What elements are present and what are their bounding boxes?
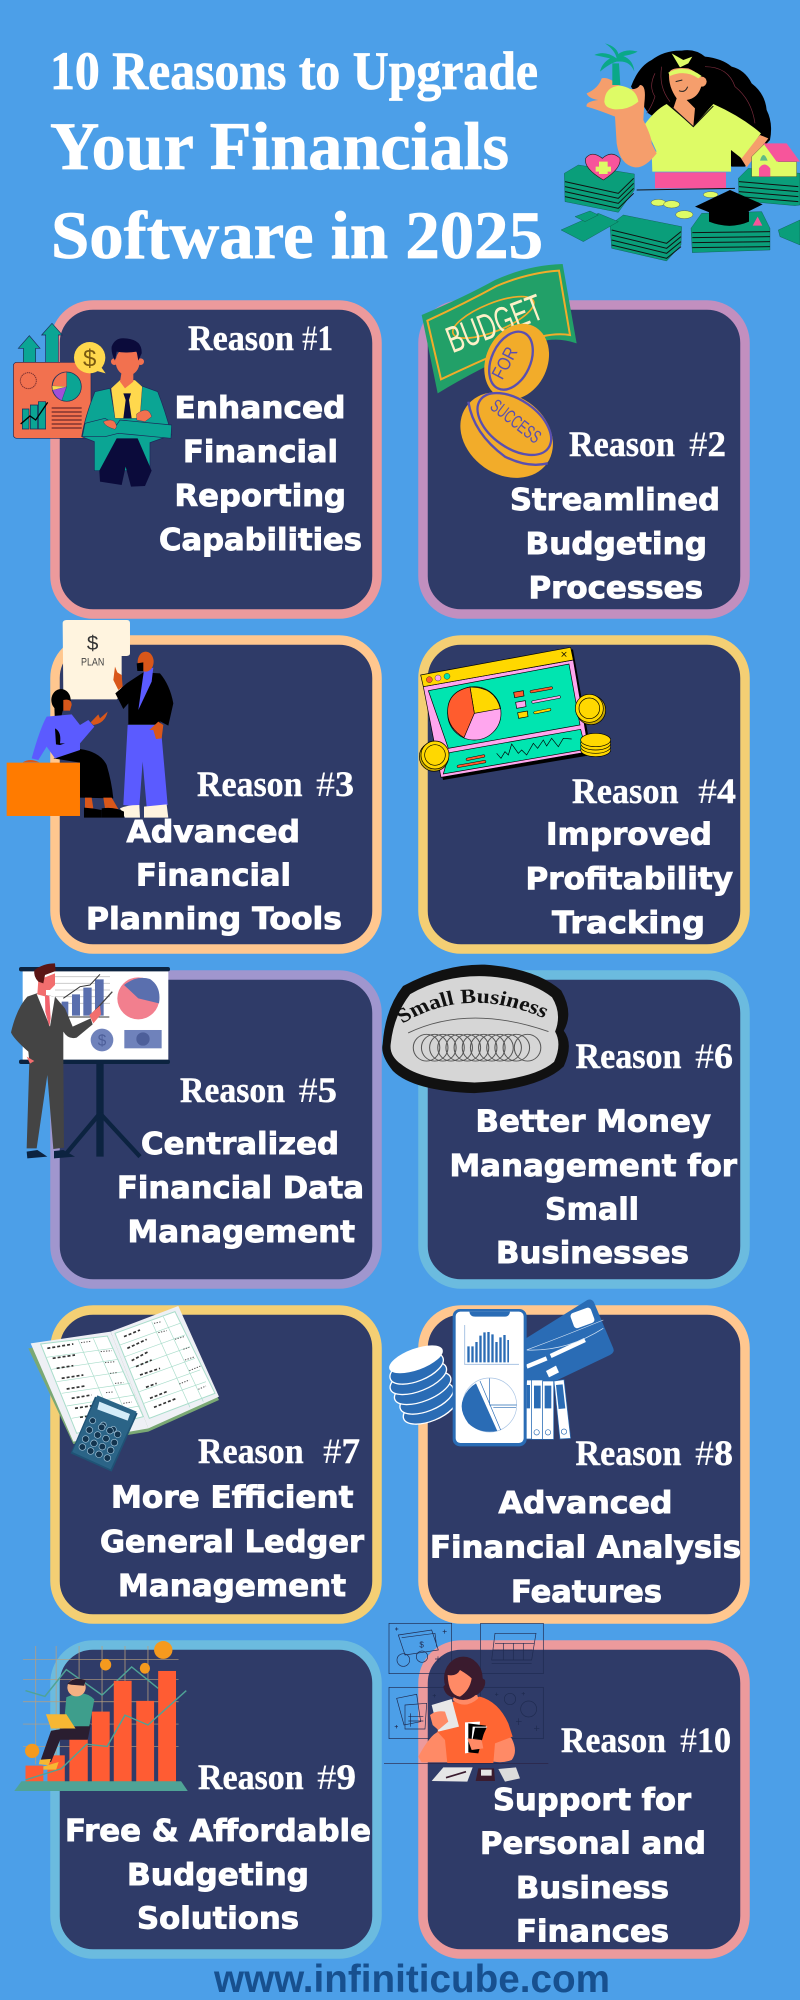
reason title: Planning Tools (86, 902, 342, 937)
icon: ledger book and calculator (28, 1306, 219, 1472)
icon: graduation cap (695, 190, 763, 226)
panel: reason 2 (422, 264, 745, 614)
reason title: Free & Affordable (65, 1814, 371, 1849)
reason title (430, 1486, 741, 1610)
icon: money stacks (561, 165, 800, 261)
reason label: #8 (695, 1433, 733, 1473)
panel: reason 4 (419, 640, 745, 949)
panel: reason 6 (382, 964, 750, 1289)
icon: presenter at chart board (11, 963, 170, 1158)
panel: reason 8 (386, 1300, 745, 1619)
reason title: Capabilities (159, 523, 362, 558)
reason title: Budgeting (526, 527, 707, 562)
reason title: Tracking (552, 906, 705, 941)
reason label (561, 1720, 731, 1760)
icon: two people with plan (7, 620, 173, 818)
reason label: Reason (198, 1757, 304, 1797)
website url footer: www.infiniticube.com (213, 1958, 610, 2000)
reason label: Reason (569, 424, 675, 464)
panel: reason 9 (14, 1641, 377, 1954)
reason label: Reason (198, 1431, 304, 1471)
reason label: Reason (576, 1036, 682, 1076)
icon: heart (585, 154, 620, 180)
reason title: Personal and (480, 1827, 706, 1862)
icon: woman with receipts and finance line art: $ (419, 1640, 424, 1649)
reason title: Profitability (526, 862, 733, 897)
reason title (526, 818, 733, 941)
reason title: Financial (136, 859, 291, 894)
icon: house (752, 143, 800, 177)
reason title: Processes (528, 571, 703, 606)
reason title: Management (118, 1569, 346, 1604)
reason label: #3 (316, 764, 354, 804)
reason title (480, 1783, 706, 1950)
reason title: Advanced (498, 1486, 672, 1521)
reason title: Businesses (496, 1236, 689, 1271)
reason title (450, 1105, 737, 1271)
title: Your Financials (50, 108, 509, 184)
reason title: Financial Analysis (430, 1531, 741, 1566)
icon: two people with plan: $ (87, 632, 99, 655)
reason title: Financial Data (117, 1171, 364, 1206)
reason title: Centralized (141, 1127, 339, 1162)
panel: reason 5 (11, 963, 377, 1284)
reason title (86, 815, 342, 937)
icon: woman with receipts and finance line art (384, 1623, 548, 1782)
icon: growth bar chart with man on laptop (14, 1641, 188, 1791)
reason label: #4 (698, 771, 736, 811)
title (50, 41, 543, 273)
reason label: #2 (689, 424, 726, 464)
reason title (510, 483, 720, 606)
reason title (65, 1814, 371, 1937)
reason title: Better Money (476, 1105, 711, 1140)
reason title: Support for (493, 1783, 691, 1818)
reason label: Reason (180, 1070, 285, 1110)
reason title: Enhanced (174, 391, 346, 426)
panel: reason 3 (7, 620, 377, 949)
icon: businessman with report board (13, 323, 172, 487)
reason title: Streamlined (510, 483, 720, 518)
reason label: Reason (197, 764, 302, 804)
reason title: More Efficient (111, 1481, 354, 1516)
reason label: Reason (572, 771, 678, 811)
reason label: Reason (188, 318, 294, 358)
reason title: Finances (516, 1914, 669, 1950)
title: Software in 2025 (51, 197, 543, 273)
reason label: #6 (695, 1036, 733, 1076)
icon: small business badge (382, 964, 569, 1094)
reason title: Management (128, 1215, 355, 1250)
icon: woman with money, house and graduation cap (561, 43, 800, 261)
icon: budget banner and coins: FOR (487, 343, 522, 383)
reason label: #1 (302, 318, 333, 358)
reason title: Advanced (126, 815, 300, 850)
icon: phone, credit card, binders and coins (386, 1300, 614, 1446)
reason title (159, 391, 362, 558)
reason title: Business (516, 1871, 669, 1906)
reason title: General Ledger (100, 1525, 364, 1560)
icon: businessman with report board: $ (83, 345, 96, 372)
reason title (117, 1127, 364, 1250)
icon: budget banner and coins (422, 264, 577, 495)
icon: small business badge: Small Business (398, 990, 548, 1023)
icon: dashboard window with coins (419, 647, 611, 780)
reason label: #5 (298, 1070, 337, 1110)
reason label: Reason (561, 1720, 666, 1760)
reason label: #7 (323, 1431, 360, 1471)
panel: reason 10 (384, 1623, 745, 1954)
reason title: Small (545, 1193, 639, 1228)
reason title: Financial (183, 435, 338, 470)
reason title: Budgeting (127, 1858, 309, 1893)
reason title: Solutions (137, 1902, 299, 1937)
panel: reason 7 (28, 1306, 377, 1619)
icon: budget banner and coins: SUCCESS (487, 395, 545, 447)
reason title: Management for (450, 1149, 737, 1184)
reason label: #10 (680, 1720, 731, 1760)
reason title: Features (511, 1575, 662, 1610)
reason label: Reason (576, 1433, 682, 1473)
reason title: Reporting (174, 479, 346, 514)
reason title (100, 1481, 364, 1604)
reason label (198, 1431, 360, 1471)
icon: budget banner and coins: BUDGET (440, 286, 549, 361)
icon: presenter at chart board: $ (98, 1033, 107, 1050)
reason title: Improved (546, 818, 712, 852)
panel: reason 1 (13, 305, 377, 614)
title: 10 Reasons to Upgrade (50, 41, 538, 101)
reason label (572, 771, 736, 811)
reason label: #9 (317, 1757, 356, 1797)
icon: two people with plan: PLAN (81, 657, 104, 669)
